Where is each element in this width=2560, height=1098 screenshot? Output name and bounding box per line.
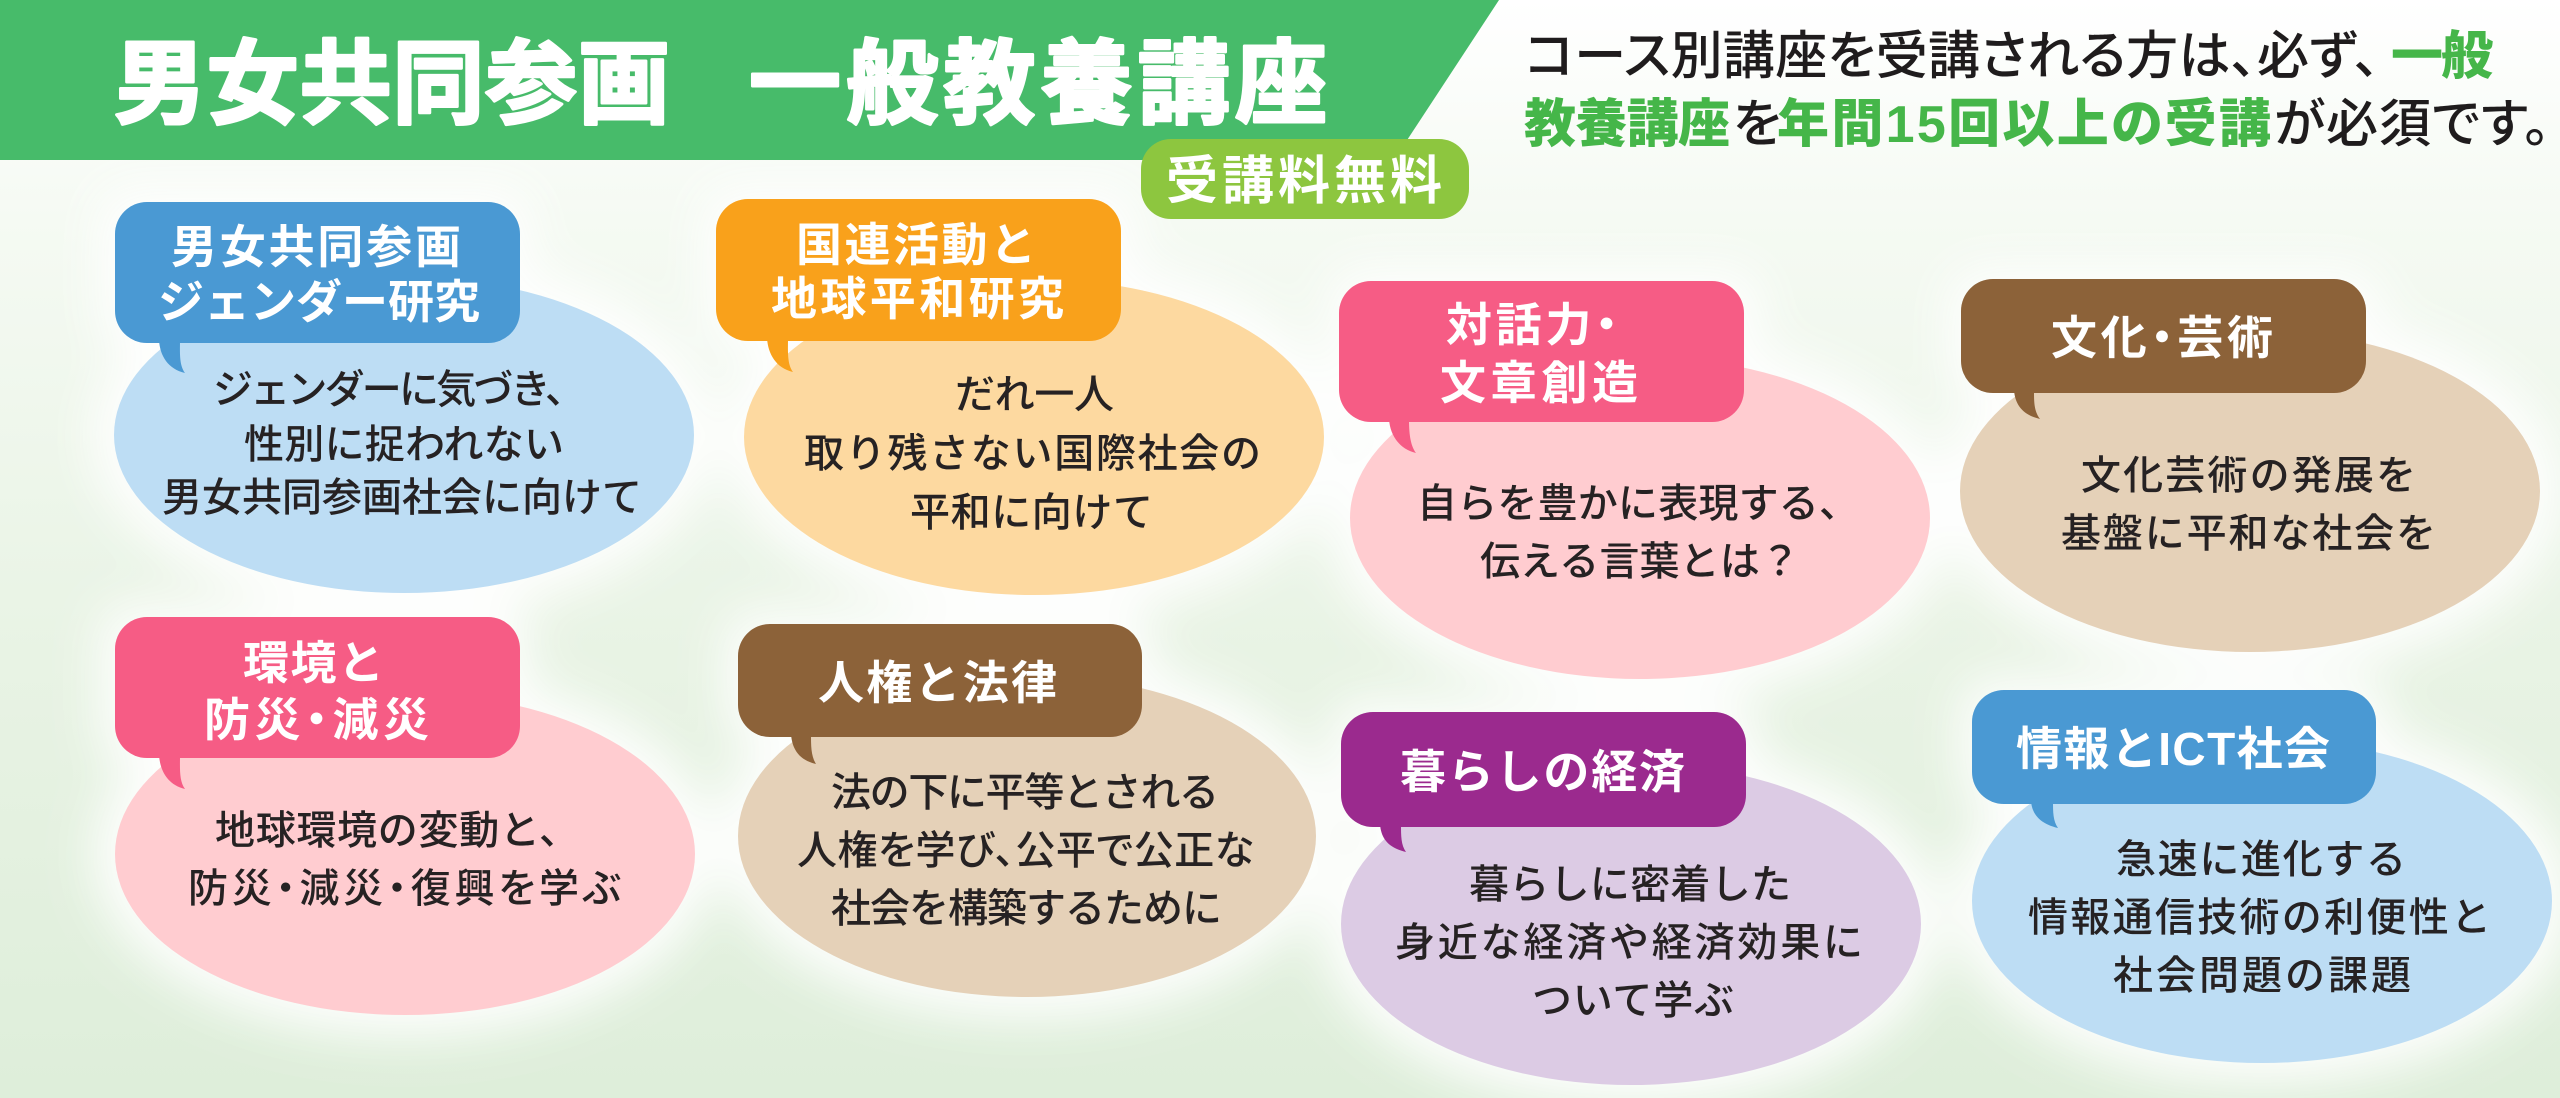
heading tab	[115, 617, 520, 789]
title: 男女共同参画	[114, 34, 670, 136]
notice text: 一般	[2391, 28, 2493, 86]
description	[188, 809, 621, 911]
description: 防災・減災・復興を学ぶ	[188, 867, 621, 911]
description	[1395, 863, 1863, 1023]
bubble ellipse	[738, 675, 1316, 997]
description: 社会を構築するために	[831, 887, 1222, 931]
notice text: が必須です。	[2274, 96, 2550, 154]
description	[1417, 482, 1859, 584]
panel: culture and art	[1960, 279, 2540, 652]
bubble ellipse	[115, 693, 695, 1015]
panel: UN and peace	[716, 199, 1324, 595]
heading tab	[738, 624, 1142, 764]
description: 取り残さない国際社会の	[804, 432, 1261, 476]
heading tab: 暮らしの経済	[1400, 746, 1685, 798]
description	[797, 771, 1254, 931]
description: 社会問題の課題	[2113, 954, 2411, 998]
heading tab	[1339, 281, 1744, 453]
description: 法の下に平等とされる	[831, 771, 1219, 815]
description	[804, 373, 1261, 535]
heading tab: 地球平和研究	[771, 273, 1064, 325]
description: ついて学ぶ	[1532, 979, 1734, 1023]
header banner	[0, 0, 1499, 160]
description	[2028, 838, 2491, 998]
heading tab	[716, 199, 1121, 372]
heading tab: 人権と法律	[818, 657, 1057, 709]
notice text: 年間15回以上の受講	[1777, 96, 2271, 154]
description: だれ一人	[955, 373, 1114, 417]
panel: gender research	[114, 202, 694, 593]
description: 身近な経済や経済効果に	[1395, 921, 1863, 965]
bubble ellipse	[1972, 739, 2552, 1063]
description	[162, 368, 642, 520]
heading tab	[1972, 690, 2376, 828]
panel: dialogue and writing	[1339, 281, 1930, 679]
title: 一般教養講座	[749, 34, 1327, 136]
description: 情報通信技術の利便性と	[2028, 896, 2491, 940]
panel: environment and disaster	[115, 617, 695, 1015]
heading tab: 国連活動と	[796, 219, 1036, 271]
badge: free admission: 受講料無料	[1166, 153, 1442, 211]
description: 自らを豊かに表現する、	[1417, 482, 1859, 526]
notice text	[1524, 28, 2550, 154]
panel: economy of daily life	[1341, 712, 1921, 1085]
panel: human rights and law	[738, 624, 1316, 997]
bubble ellipse	[1350, 357, 1930, 679]
description: 地球環境の変動と、	[215, 809, 579, 853]
description: 基盤に平和な社会を	[2061, 512, 2436, 556]
description: 男女共同参画社会に向けて	[162, 476, 642, 520]
notice text: コース別講座を受講される方は、必ず、	[1525, 28, 2380, 86]
heading tab: 文化・芸術	[2051, 312, 2273, 364]
heading tab: 対話力・	[1446, 299, 1618, 351]
description: 急速に進化する	[2116, 838, 2406, 882]
heading tab: 環境と	[243, 637, 384, 689]
heading tab: 男女共同参画	[171, 221, 461, 273]
notice text: 教養講座	[1524, 96, 1730, 154]
badge: free admission	[1141, 139, 1469, 219]
description: ジェンダーに気づき、	[213, 368, 585, 412]
heading tab: ジェンダー研究	[158, 276, 480, 328]
bubble ellipse	[744, 279, 1324, 595]
heading tab: 文章創造	[1440, 357, 1638, 409]
description: 暮らしに密着した	[1469, 863, 1791, 907]
description: 人権を学び、公平で公正な	[797, 829, 1254, 873]
heading tab	[115, 202, 520, 373]
bubble ellipse	[114, 277, 694, 593]
heading tab: 防災・減災	[204, 694, 429, 746]
description	[2061, 454, 2436, 556]
heading tab	[1341, 712, 1746, 852]
description: 平和に向けて	[910, 491, 1153, 535]
description: 性別に捉われない	[244, 423, 564, 467]
heading tab	[1961, 279, 2366, 419]
description: 文化芸術の発展を	[2081, 454, 2416, 498]
description: 伝える言葉とは？	[1480, 540, 1800, 584]
bubble ellipse	[1341, 763, 1921, 1085]
notice text: を	[1733, 96, 1781, 154]
title	[114, 34, 1327, 136]
bubble ellipse	[1960, 330, 2540, 652]
panel: information and ICT	[1972, 690, 2552, 1063]
heading tab: 情報とICT社会	[2016, 723, 2330, 775]
